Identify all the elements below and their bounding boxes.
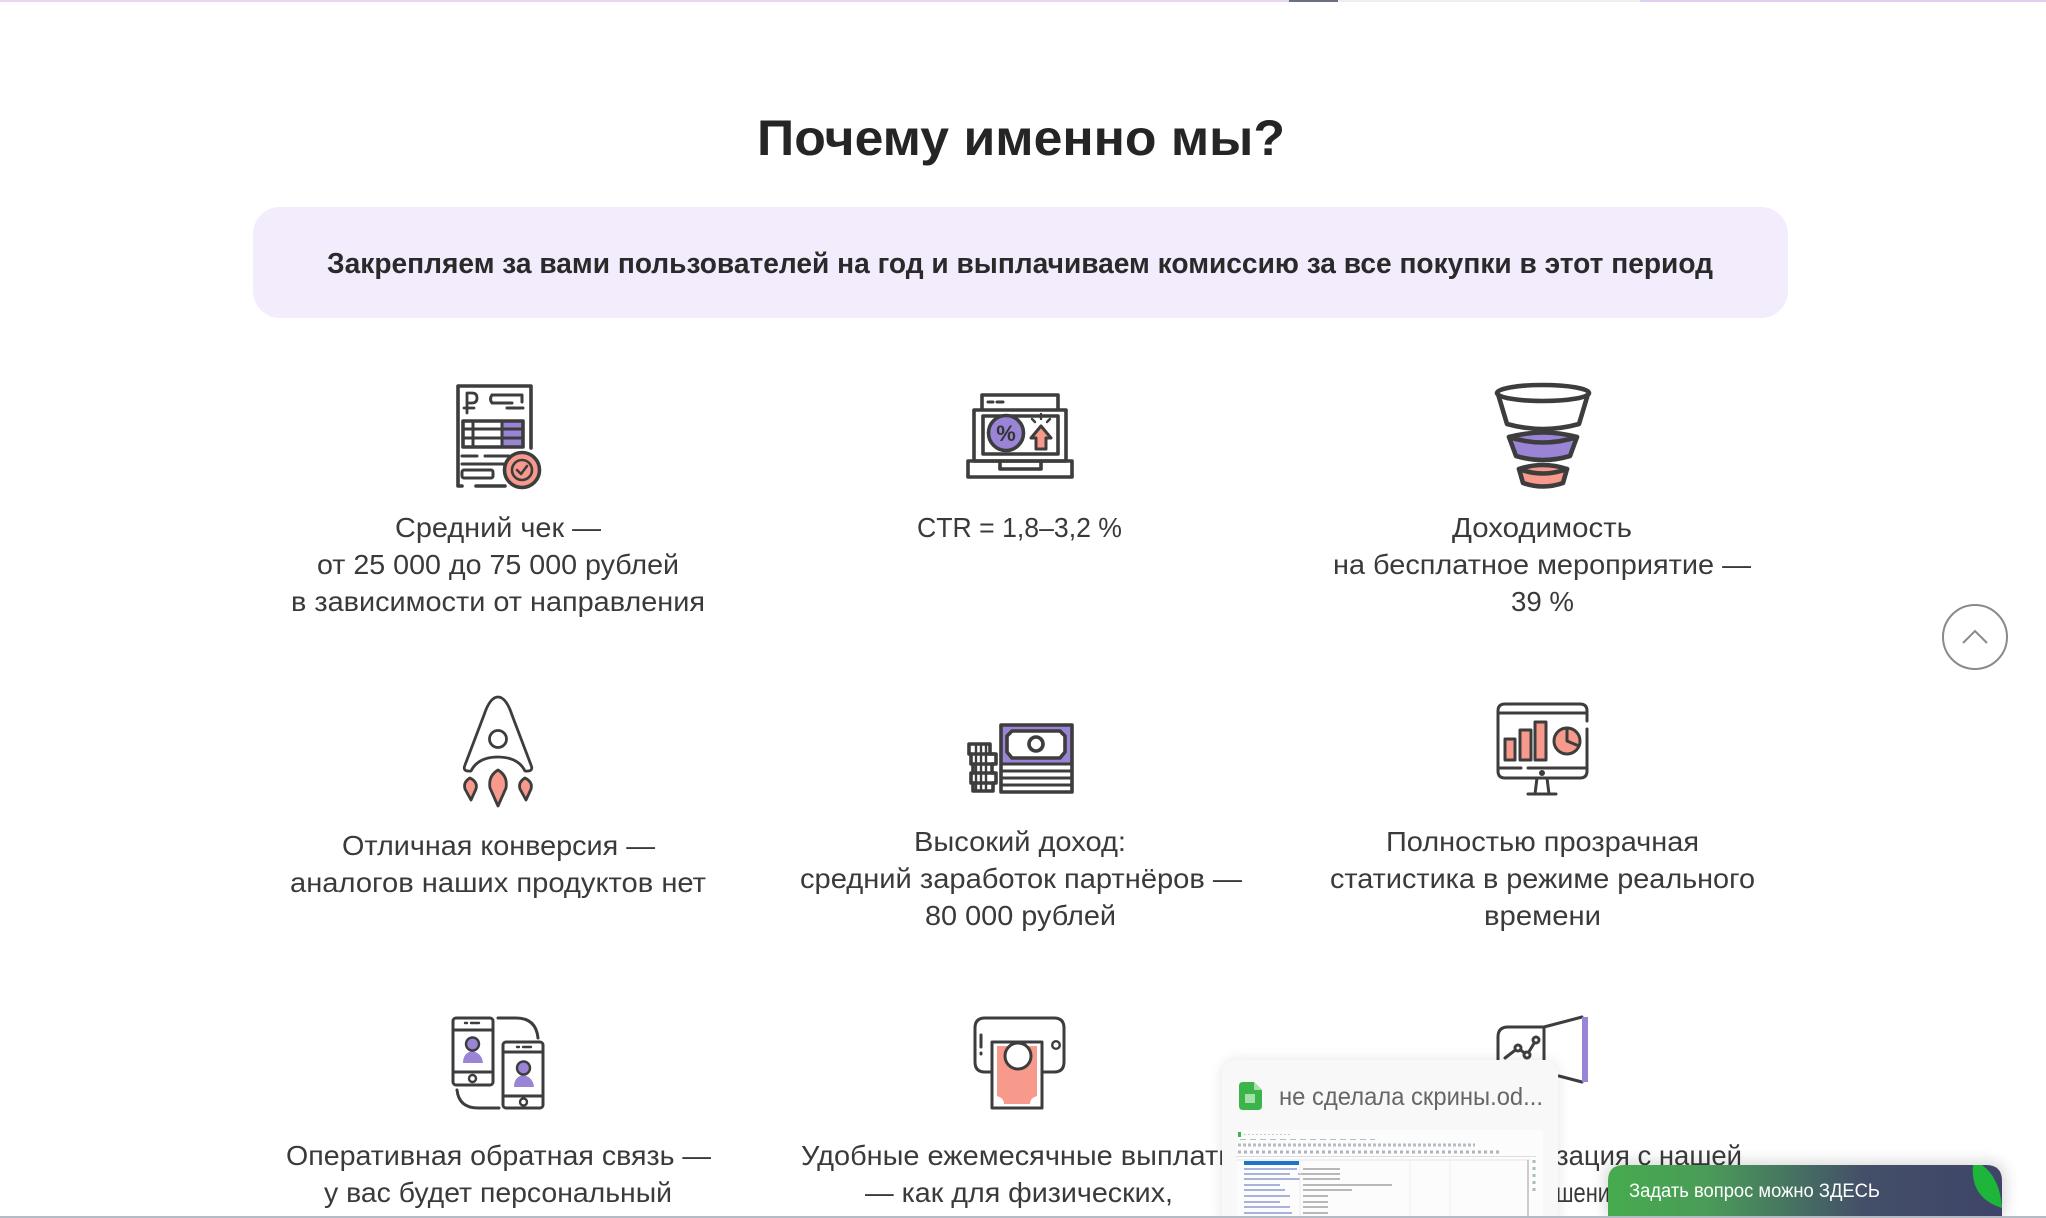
text: high income: средний заработок партнёров — [800,863,1242,894]
text: monthly payouts: — как для физических, [865,1177,1173,1208]
text: profitability [1333,512,1751,617]
text: transparent statistics: времени [1484,900,1601,931]
text: CTR: CTR = 1,8–3,2 % [917,512,1122,543]
title: Почему именно мы? [757,110,1285,166]
text: profitability: 39 % [1511,586,1574,617]
text: third column partially hidden [1556,1140,1742,1208]
text: average check: от 25 000 до 75 000 рублей [317,549,679,580]
icon: phone with banknote [975,1018,1064,1108]
text: average check: в зависимости от направления [291,586,705,617]
text: feedback: Оперативная обратная связь — [286,1140,711,1171]
text: monthly payouts [801,1140,1239,1208]
text: high income: Высокий доход: [914,826,1126,857]
text: transparent statistics: статистика в режиме реального [1330,863,1755,894]
text: conversion: аналогов наших продуктов нет [290,867,706,898]
text: conversion: Отличная конверсия — [342,830,655,861]
text: average check [291,512,705,617]
text: profitability: Доходимость [1452,512,1632,543]
icon: monitor with statistics [1498,704,1587,794]
icon: cash and coins [969,725,1072,792]
text: high income: 80 000 рублей [925,900,1116,931]
icon: laptop with percent and arrow: % [996,421,1016,446]
text: high income [800,826,1242,931]
chat widget [1604,1161,2006,1218]
text: third column partially hidden: шени [1556,1177,1610,1208]
icon: receipt with ruble and stamp [458,386,540,488]
text: monthly payouts: Удобные ежемесячные выплаты [801,1140,1239,1171]
banner panel [253,207,1788,318]
spreadsheet screenshot [1236,1130,1543,1218]
text: transparent statistics: Полностью прозрачная [1386,826,1699,857]
bottom window edge [0,1216,2046,1218]
scroll to top button [1943,605,2007,669]
chat widget label: Задать вопрос можно ЗДЕСЬ [1629,1181,1880,1202]
icon: sales funnel [1497,385,1589,486]
text: third column partially hidden: зация с нашей [1556,1140,1742,1171]
chat widget green accent [1973,1165,2002,1208]
icon: laptop with percent and arrow [968,395,1072,477]
popup: file download preview [1222,1060,1558,1218]
text: feedback [286,1140,711,1208]
icon: megaphone with chart [1498,1017,1588,1082]
icon: two phones with contacts [453,1018,543,1108]
popup file name: не сделала скрины.od... [1279,1083,1543,1111]
text: transparent statistics [1330,826,1755,931]
text: average check: Средний чек — [395,512,601,543]
text: conversion [290,830,706,898]
top page edge strip [0,0,2046,2]
icon: rocket [464,697,532,806]
text: feedback: у вас будет персональный [324,1177,672,1208]
text: profitability: на бесплатное мероприятие — [1333,549,1751,580]
icon: green spreadsheet file [1239,1082,1262,1110]
banner text: Закрепляем за вами пользователей на год и выплачиваем комиссию за все покупки в этот период [327,248,1713,280]
